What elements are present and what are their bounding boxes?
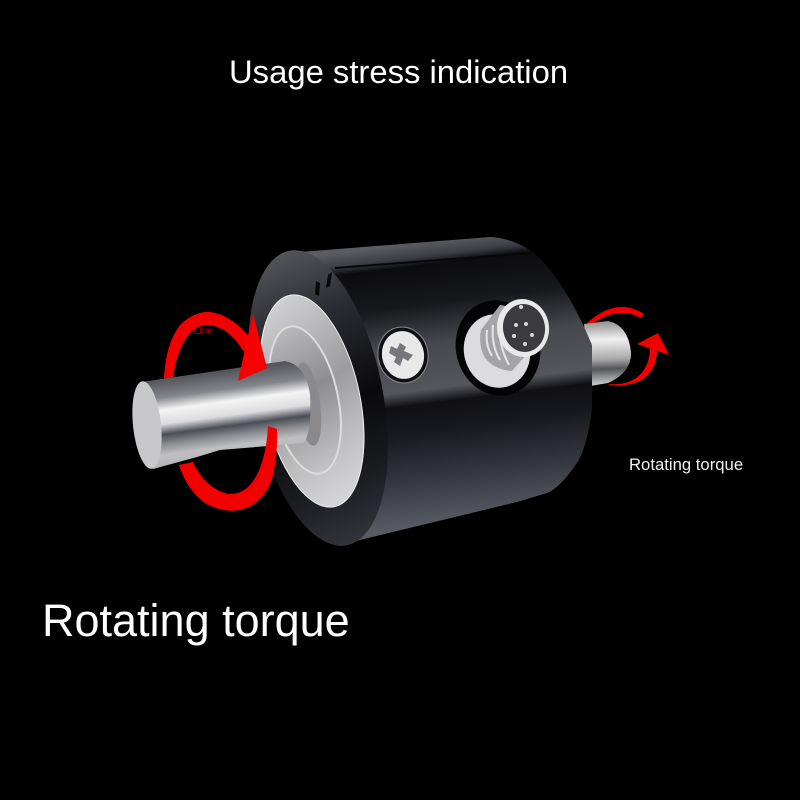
shaft shoulder bbox=[290, 361, 326, 447]
inner disc hub bbox=[257, 320, 353, 480]
right shaft arrow, lower arc and head bbox=[608, 333, 669, 386]
tiny red label: One bbox=[194, 326, 213, 337]
large heading: rotating torque: Rotating torque bbox=[42, 595, 350, 646]
large arrowhead bbox=[238, 313, 267, 381]
connector bbox=[445, 291, 553, 405]
housing seam bbox=[335, 253, 532, 268]
large arrow, upper arc behind shaft bbox=[164, 312, 250, 380]
right shaft bbox=[584, 321, 631, 386]
main shaft bbox=[128, 361, 310, 470]
silver face disc bbox=[243, 285, 381, 517]
small label: rotating torque: Rotating torque bbox=[629, 455, 743, 474]
sensor housing bbox=[300, 237, 592, 546]
right shaft arrow, upper arc bbox=[586, 307, 644, 326]
flange notch bbox=[315, 272, 332, 296]
large arrow, lower arc bbox=[179, 426, 277, 511]
front flange bbox=[226, 238, 410, 558]
screw bbox=[374, 323, 432, 387]
title: Usage stress indication bbox=[229, 53, 568, 90]
